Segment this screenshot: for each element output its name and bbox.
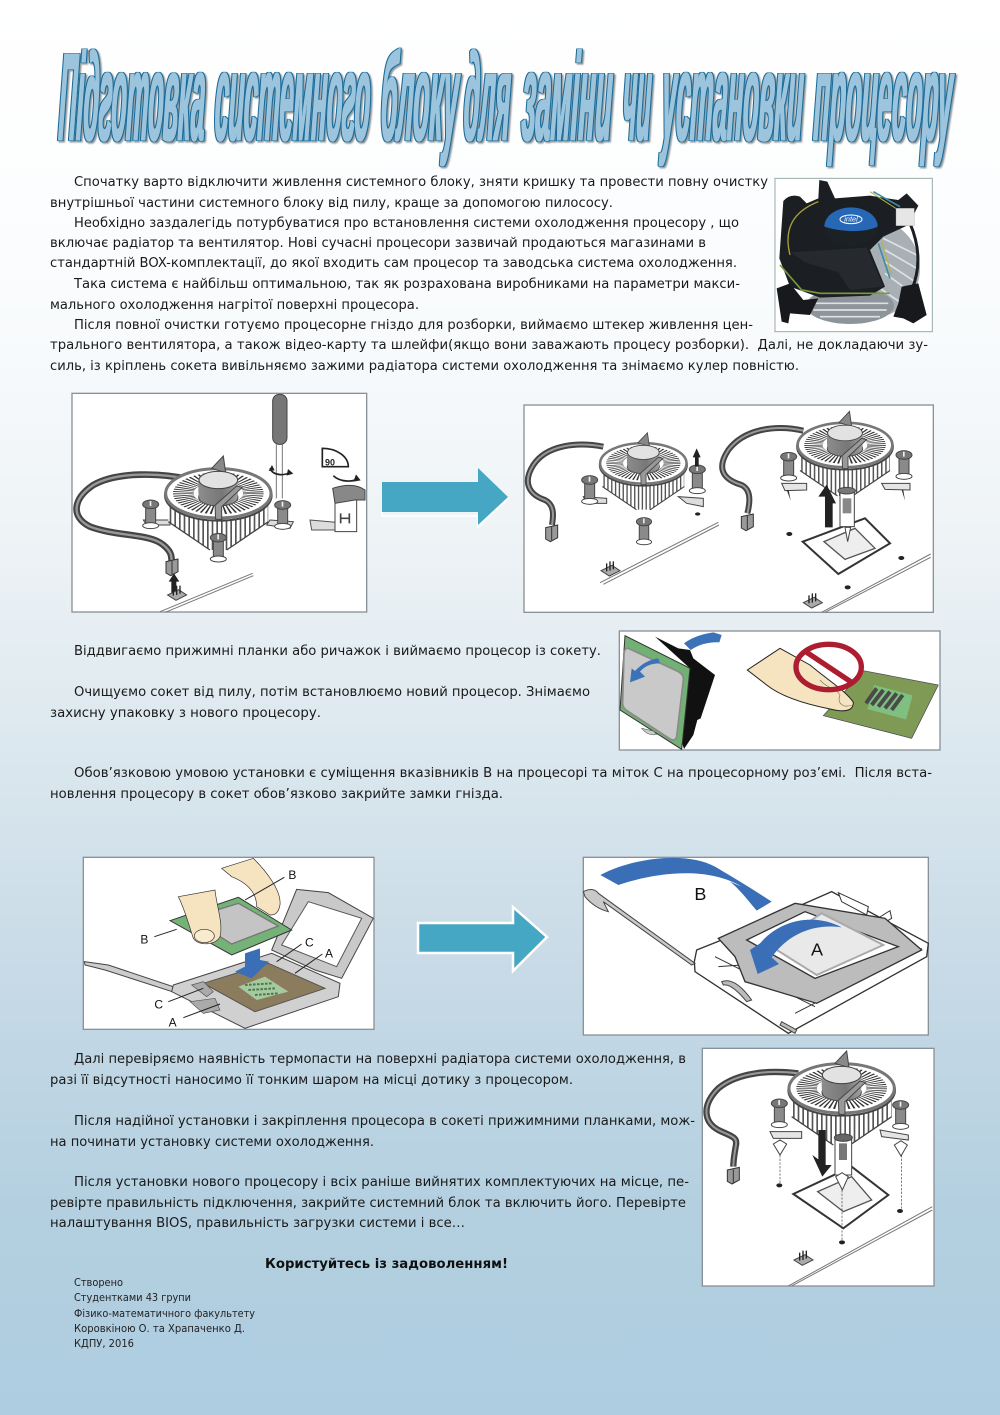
text: remove processor	[50, 644, 601, 721]
socket	[776, 1155, 903, 1244]
text: final steps: разі її відсутності наносимо її тонким шаром на місці дотику з процесором.	[50, 1073, 573, 1088]
intro text: включає радіатор та вентилятор. Нові сучасні процесори зазвичай продаються магазинами в	[50, 236, 706, 251]
processor cap and cover	[620, 632, 722, 749]
text: remove processor: Віддвигаємо прижимні планки або ричажок і виймаємо процесор із сокету.	[74, 644, 601, 659]
arrow: step 1 to step 2	[382, 468, 509, 527]
title: блоку	[379, 28, 462, 167]
intro text: силь, із кріплень сокета вивільняємо зажими радіатора системи охолодження та знімаємо кулер повністю.	[50, 359, 799, 374]
callout labels A B C: A	[325, 946, 333, 960]
letters: B	[694, 884, 706, 904]
intro text: внутрішньої частини системного блоку від пилу, краще за допомогою пилососу.	[50, 196, 613, 211]
title: для	[462, 28, 513, 167]
intro text: мального охолодження нагрітої поверхні процесора.	[50, 298, 419, 313]
callout labels A B C: A	[169, 1016, 177, 1030]
intro text	[50, 175, 928, 374]
intro text: Така система є найбільш оптимальною, так як розрахована виробниками на параметри макси-	[73, 277, 740, 292]
credits: Студентками 43 групи	[74, 1292, 191, 1304]
icon: 90 degree rotation: 90	[325, 457, 335, 467]
callout labels A B C: B	[140, 932, 148, 946]
title: заміни	[520, 28, 615, 167]
cooler with pins	[770, 1051, 909, 1190]
callout labels A B C	[140, 868, 333, 1030]
callout labels A B C: C	[305, 935, 314, 949]
credits: Створено	[74, 1277, 123, 1289]
intro text: Спочатку варто відключити живлення системного блоку, зняти кришку та провести повну очистку	[74, 175, 768, 190]
socket and load plate	[583, 890, 928, 1033]
callout labels A B C: B	[288, 868, 296, 882]
photo: boxed Intel cooler: intel	[844, 215, 858, 224]
board edge	[160, 573, 253, 612]
text: final steps: ревірте правильність підключення, закрийте системний блок та включить його. Перевірте	[50, 1196, 686, 1211]
text: alignment instructions: новлення процесору в сокет обов’язково закрийте замки гнізда.	[50, 787, 503, 802]
text: final steps: Після надійної установки і закріплення процесора в сокеті прижимними планками, мож-	[74, 1114, 695, 1129]
credits: КДПУ, 2016	[74, 1338, 134, 1350]
processor held by fingers	[170, 858, 292, 955]
credits: Коровкіною О. та Храпаченко Д.	[74, 1323, 245, 1335]
left cooler lifted	[528, 433, 719, 584]
title: системного	[213, 28, 373, 167]
panel: new processor handling	[619, 631, 940, 750]
text: final steps: Після установки нового процесору і всіх раніше вийнятих комплектуючих на місце, пе-	[74, 1175, 689, 1190]
screwdriver	[269, 394, 293, 498]
panel: cooler removal step 2	[524, 405, 933, 612]
blue down arrow	[235, 948, 269, 978]
letters: A	[811, 940, 823, 960]
text: final steps: налаштування BIOS, правильність загрузки системи і все…	[50, 1216, 465, 1231]
title: Підготовка	[57, 28, 208, 167]
intro text: трального вентилятора, а також відео-карту та шлейфи(якщо вони заважають процесу розборки). Далі, не докладаючи зу-	[50, 338, 928, 353]
photo: boxed Intel cooler	[775, 178, 932, 332]
text: remove processor: захисну упаковку з нового процесору.	[50, 706, 321, 721]
callout labels A B C: C	[154, 998, 163, 1012]
panel: closing socket lever	[583, 857, 928, 1035]
panel: installing cooler	[702, 1048, 934, 1286]
credits: Фізико-математичного факультету	[74, 1308, 255, 1320]
text: remove processor: Очищуємо сокет від пилу, потім встановлюємо новий процесор. Знімаємо	[74, 685, 590, 700]
intro text: Після повної очистки готуємо процесорне гніздо для розборки, виймаємо штекер живлення цен-	[74, 318, 753, 333]
panel: cooler removal step 1	[72, 393, 367, 612]
cooler	[143, 456, 293, 562]
title: чи	[621, 28, 654, 167]
cable and connector	[77, 475, 193, 600]
text: alignment instructions	[50, 766, 932, 802]
socket lid and lever	[84, 889, 373, 1028]
credits	[74, 1277, 255, 1350]
icon: 90 degree rotation	[310, 448, 365, 532]
intro text: стандартній BOX-комплектації, до якої входить сам процесор та заводська система охолодження.	[50, 256, 737, 271]
right cooler above socket	[722, 411, 931, 612]
text: final steps	[50, 1052, 695, 1231]
letters	[694, 884, 823, 960]
arrow: step 3 to step 4	[418, 907, 547, 971]
closing message: Користуйтесь із задоволенням!	[265, 1257, 508, 1272]
text: final steps: на починати установку системи охолодження.	[50, 1135, 374, 1150]
intro text: Необхідно заздалегідь потурбуватися про встановлення системи охолодження процесору , що	[74, 216, 739, 231]
cable	[706, 1072, 798, 1184]
panel: placing processor in socket	[83, 857, 374, 1030]
do not touch contacts	[747, 644, 938, 738]
blue arrows	[600, 858, 842, 974]
text: alignment instructions: Обов’язковою умовою установки є суміщення вказівників В на процесорі та міток С на процесорному роз’ємі. Після вста-	[74, 766, 932, 781]
text: final steps: Далі перевіряємо наявність термопасти на поверхні радіатора системи охолодження, в	[74, 1052, 686, 1067]
